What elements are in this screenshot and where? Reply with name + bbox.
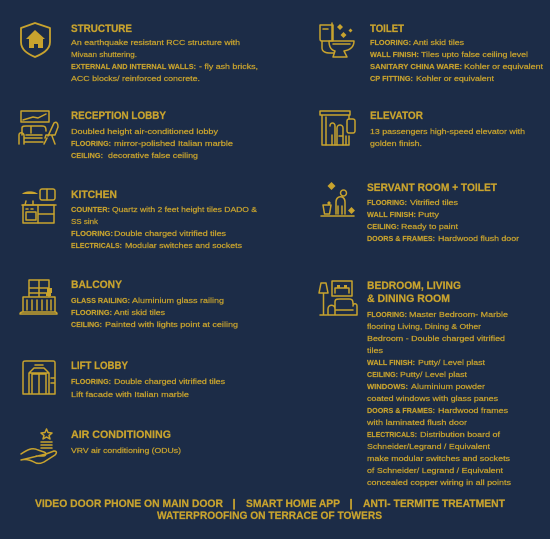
text: bedroom details: tiles — [367, 346, 383, 355]
text: toilet details: Kohler or equivalent — [464, 62, 543, 71]
text: bedroom details: FLOORING: — [367, 310, 407, 319]
footer: additional features: SMART HOME APP — [246, 498, 340, 510]
text: balcony details: GLASS RAILING: — [71, 296, 130, 305]
icon: toilet — [320, 23, 354, 57]
text: structure details: - fly ash bricks, — [199, 62, 258, 71]
panel: elevator — [320, 110, 525, 148]
heading: bedroom, living and dining room: BEDROOM, LIVING — [367, 280, 461, 292]
footer: additional features — [35, 498, 505, 522]
text: reception details: Doubled height air-conditioned lobby — [71, 127, 218, 136]
footer: additional features: | — [232, 498, 236, 510]
text: balcony details — [71, 296, 238, 329]
text: kitchen details: Modular switches and sockets — [125, 241, 242, 250]
panel: bedroom, living and dining room — [319, 280, 511, 487]
text: toilet details: FLOORING: — [370, 38, 411, 47]
text: bedroom details: make modular switches and sockets — [367, 454, 510, 463]
footer: additional features: ANTI- TERMITE TREATMENT — [363, 498, 505, 510]
text: balcony details: FLOORING: — [71, 308, 112, 317]
heading: elevator: ELEVATOR — [370, 110, 423, 122]
panel: air conditioning — [21, 429, 181, 464]
text: reception details: CEILING: — [71, 151, 103, 160]
text: bedroom details: ELECTRICALS: — [367, 430, 417, 439]
text: bedroom details — [366, 310, 511, 487]
footer: additional features: | — [350, 498, 353, 510]
text: servant room details — [367, 198, 520, 243]
text: lift lobby details — [71, 377, 225, 399]
text: servant room details: WALL FINISH: — [367, 210, 416, 219]
text: reception details: FLOORING: — [71, 139, 111, 148]
heading: structure: STRUCTURE — [71, 23, 132, 35]
text: bedroom details: DOORS & FRAMES: — [367, 406, 435, 415]
heading: servant room + toilet: SERVANT ROOM + TOILET — [367, 182, 498, 194]
text: structure details: EXTERNAL AND INTERNAL WALLS: — [71, 62, 196, 71]
text: structure details: An earthquake resistant RCC structure with — [71, 38, 240, 47]
text: reception details: mirror-polished Italian marble — [114, 139, 233, 148]
text: servant room details: FLOORING: — [367, 198, 407, 207]
text: balcony details: Aluminium glass railing — [132, 296, 224, 305]
text: bedroom details: coated windows with glass panes — [367, 394, 498, 403]
panel: reception lobby — [19, 110, 233, 160]
heading: lift lobby: LIFT LOBBY — [71, 360, 128, 372]
text: bedroom details: Putty/ Level plast — [418, 358, 485, 367]
text: bedroom details: Bedroom - Double charged vitrified — [367, 334, 505, 343]
text: reception details: decorative false ceiling — [108, 151, 198, 160]
text: servant room details: DOORS & FRAMES: — [367, 234, 435, 243]
panel: balcony — [20, 279, 238, 329]
text: bedroom details: concealed copper wiring in all points — [367, 478, 511, 487]
icon: kitchen counter — [22, 189, 56, 223]
heading: air conditioning: AIR CONDITIONING — [71, 429, 171, 441]
text: bedroom details: of Schneider/ Legrand / Equivalent — [367, 466, 503, 475]
heading: bedroom, living and dining room: & DINING ROOM — [367, 293, 450, 305]
text: lift lobby details: Double charged vitrified tiles — [114, 377, 225, 386]
text: structure details — [71, 38, 258, 83]
text: kitchen details: Double charged vitrified tiles — [114, 229, 226, 238]
panel: structure — [21, 23, 258, 83]
text: bedroom details: Distribution board of — [420, 430, 501, 439]
icon: lift — [23, 361, 55, 394]
heading: kitchen: KITCHEN — [71, 189, 117, 201]
text: toilet details: Anti skid tiles — [413, 38, 464, 47]
heading: bedroom, living and dining room — [367, 280, 461, 305]
text: kitchen details: FLOORING: — [71, 229, 113, 238]
text: toilet details: CP FITTING: — [370, 74, 413, 83]
text: servant room details: Ready to paint — [401, 222, 458, 231]
text: balcony details: Anti skid tiles — [114, 308, 165, 317]
text: bedroom details: Master Bedroom- Marble — [409, 310, 508, 319]
text: toilet details: Kohler or equivalent — [416, 74, 494, 83]
panel: lift lobby — [23, 360, 225, 399]
icon: hand with star — [21, 429, 56, 464]
heading: toilet: TOILET — [370, 23, 404, 35]
text: bedroom details: WINDOWS: — [367, 382, 408, 391]
text: servant room details: CEILING: — [367, 222, 399, 231]
icon: servant cleaning — [321, 182, 355, 216]
text: bedroom details: Hardwood frames — [438, 406, 508, 415]
text: air conditioning details: VRV air conditioning (ODUs) — [71, 446, 181, 455]
text: structure details: ACC blocks/ reinforced concrete. — [71, 74, 200, 83]
text: reception details — [71, 127, 233, 160]
footer: additional features: VIDEO DOOR PHONE ON MAIN DOOR — [35, 498, 223, 510]
panel: servant room and toilet — [321, 182, 520, 243]
text: toilet details — [370, 38, 543, 83]
text: bedroom details: Schneider/Legrand / Equivalent — [367, 442, 490, 451]
text: bedroom details: CEILING: — [367, 370, 398, 379]
icon: elevator — [320, 111, 355, 145]
text: toilet details: Tiles upto false ceiling level — [421, 50, 528, 59]
icon: balcony — [20, 280, 57, 314]
text: kitchen details: COUNTER: — [71, 205, 110, 214]
text: kitchen details — [71, 205, 257, 250]
text: toilet details: WALL FINISH: — [370, 50, 419, 59]
text: bedroom details: Aluminium powder — [411, 382, 486, 391]
icon: sofa and picture — [19, 111, 58, 144]
panel: toilet — [320, 23, 543, 83]
text: balcony details: CEILING: — [71, 320, 102, 329]
text: servant room details: Putty — [418, 210, 439, 219]
text: bedroom details: flooring Living, Dining & Other — [367, 322, 482, 331]
text: servant room details: Vitrified tiles — [410, 198, 458, 207]
text: toilet details: SANITARY CHINA WARE: — [370, 62, 462, 71]
heading: reception lobby: RECEPTION LOBBY — [71, 110, 166, 122]
panel: kitchen — [22, 189, 257, 250]
heading: balcony: BALCONY — [71, 279, 122, 291]
icon: lamp, sofa and picture — [319, 281, 357, 315]
text: elevator details — [370, 127, 525, 148]
footer: additional features: WATERPROOFING ON TERRACE OF TOWERS — [157, 510, 382, 522]
text: kitchen details: ELECTRICALS: — [71, 241, 122, 250]
text: servant room details: Hardwood flush door — [438, 234, 520, 243]
text: elevator details: golden finish. — [370, 139, 422, 148]
text: bedroom details: Putty/ Level plast — [400, 370, 467, 379]
icon: shield with house — [21, 23, 50, 57]
text: lift lobby details: FLOORING: — [71, 377, 111, 386]
text: elevator details: 13 passengers high-speed elevator with — [370, 127, 525, 136]
text: bedroom details: with laminated flush door — [366, 418, 468, 427]
text: balcony details: Painted with lights point at ceiling — [105, 320, 238, 329]
text: bedroom details: WALL FINISH: — [367, 358, 415, 367]
text: kitchen details: SS sink — [71, 217, 98, 226]
text: kitchen details: Quartz with 2 feet height tiles DADO & — [112, 205, 257, 214]
text: lift lobby details: Lift facade with Italian marble — [71, 390, 189, 399]
text: structure details: Mivaan shuttering. — [71, 50, 137, 59]
